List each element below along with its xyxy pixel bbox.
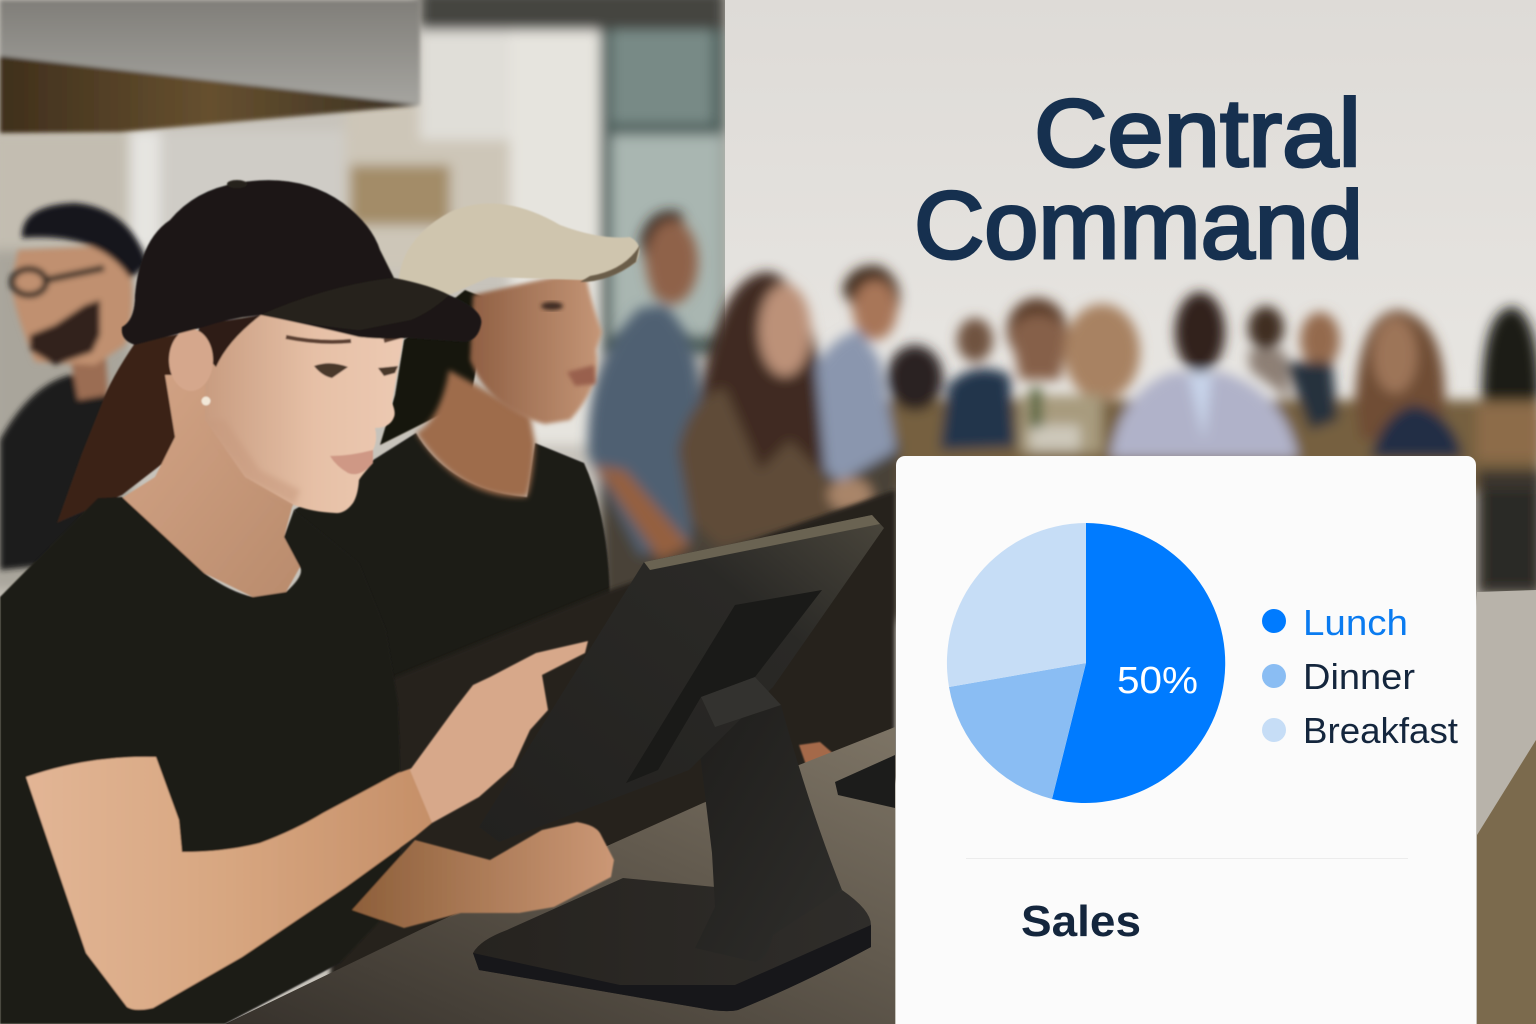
face [205,315,404,513]
base [473,878,871,1011]
shirt [0,497,400,1024]
shadowed area behind terminal [330,490,895,980]
pie value label: 50% [1117,660,1198,702]
hair [380,290,490,445]
far forearm and lower hand [352,822,614,928]
eye [541,302,563,310]
hair side [195,315,261,367]
shirt [294,433,640,860]
ponytail [57,330,200,523]
legend: breakfast: Breakfast [1303,710,1458,751]
legend: lunch: Lunch [1303,602,1408,643]
cap underside [580,245,640,282]
legend: dinner [1262,656,1415,697]
POS terminal [473,515,884,1011]
cap [398,204,639,297]
upper arm and forearm [26,757,432,1010]
second worker in beige cap [294,204,640,860]
keyboard [835,755,895,808]
customer: man in lavender shirt [1110,292,1298,458]
jaw shadow [205,420,300,505]
neck [416,370,535,497]
panel: sales card [896,456,1476,1024]
customer: striped shirt man [816,266,900,512]
second worker far hand [799,742,852,785]
customer: right group [1248,306,1536,460]
column [695,705,842,962]
cap button [227,180,247,188]
lower restaurant backdrop [880,400,1536,490]
back wall [725,0,1536,420]
title: Central [1034,80,1361,187]
mount plate [626,590,822,783]
neck [122,375,300,597]
lips [330,450,373,474]
title [914,80,1363,279]
cap [122,180,481,345]
face [470,270,602,424]
blurred crowd [588,211,1536,620]
eyes [314,363,398,378]
cap brim highlight [261,278,449,330]
main worker [0,180,614,1024]
customer: brown top woman [678,272,832,548]
mouth [567,365,596,386]
touching hand [410,641,588,823]
legend: lunch [1262,602,1408,643]
counter [225,590,1536,1024]
background worker with glasses [0,203,148,570]
sales heading: Sales [1021,897,1141,946]
title: Command [914,172,1363,279]
screen top bevel [644,515,880,570]
eyebrows [286,336,402,342]
range hood [0,0,420,133]
pie chart [947,523,1225,803]
legend: dinner: Dinner [1303,656,1415,697]
screen back [479,515,884,842]
earring [202,396,210,406]
ear [169,329,213,391]
legend [1262,602,1458,751]
customer: seated group [887,298,1140,453]
hinge [701,677,781,727]
customer: blue shirt man [588,211,700,560]
